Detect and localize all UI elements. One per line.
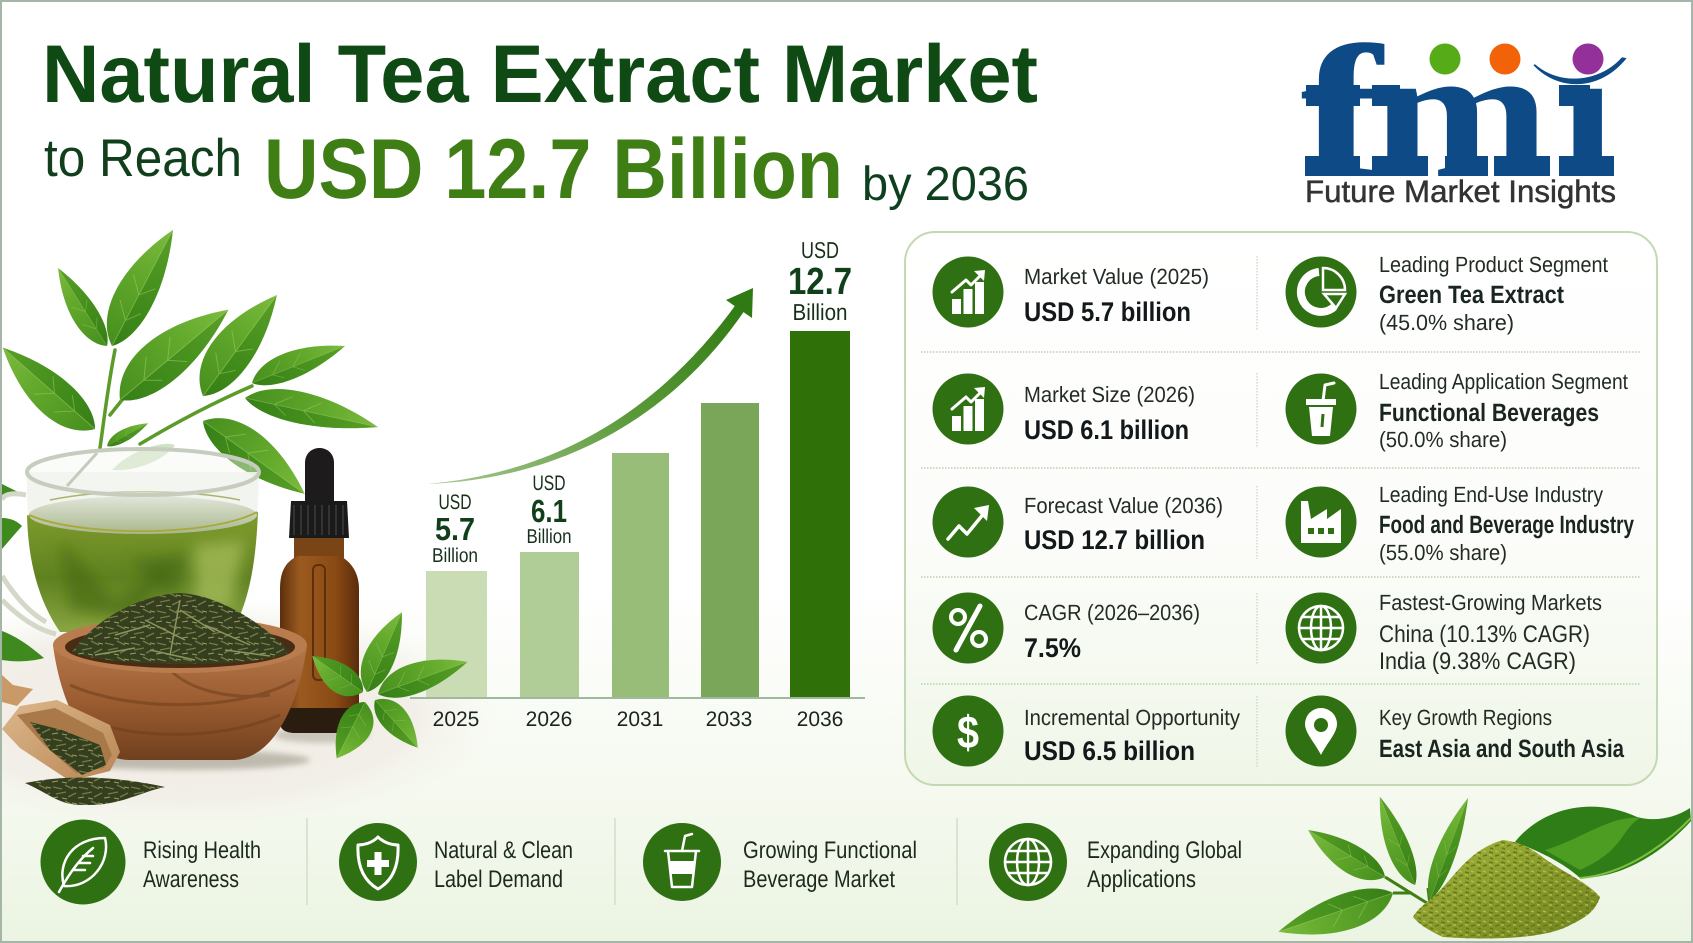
driver: expanding global applications: Expanding Global: [1087, 837, 1242, 864]
logo letter m: m: [1372, 8, 1550, 218]
year labels: 2025: [433, 708, 479, 731]
metric: fastest-growing markets: India (9.38% CAGR): [1379, 648, 1576, 675]
metric: incremental opportunity: Incremental Opportunity: [1024, 705, 1240, 730]
metric: key growth regions: Key Growth Regions: [1379, 705, 1552, 730]
value label 2026: USD: [532, 472, 566, 495]
illustration: matcha powder and leaves: [1273, 793, 1691, 943]
metric: key growth regions: East Asia and South Asia: [1379, 735, 1625, 763]
logo dots: [1430, 44, 1604, 74]
metric: incremental opportunity: [932, 696, 1240, 766]
icon: beverage cup: [643, 823, 721, 901]
driver: expanding global applications: [989, 823, 1242, 901]
metric: leading application segment: (50.0% share): [1379, 427, 1507, 452]
metric: market value 2025: USD 5.7 billion: [1024, 297, 1191, 327]
metric: leading product segment: Green Tea Extract: [1379, 281, 1565, 309]
driver: natural and clean label: Label Demand: [434, 866, 563, 893]
drivers strip: [40, 818, 1242, 905]
panel: key metrics: [905, 232, 1657, 785]
year labels: 2026: [526, 708, 572, 731]
value label 2025: Billion: [432, 545, 478, 567]
driver: natural and clean label: [339, 823, 573, 901]
icon: globe: [1286, 592, 1356, 664]
bar 2033: [701, 403, 759, 698]
icon: dollar: [932, 696, 1004, 766]
icon: percent: [932, 592, 1004, 664]
title: by year: by 2036: [862, 158, 1029, 211]
metric: key growth regions: [1286, 696, 1625, 766]
glass cup of green tea: [2, 444, 259, 634]
driver: rising health awareness: [40, 820, 261, 904]
metric: leading end-use industry: Leading End-Use Industry: [1379, 482, 1603, 507]
logo wordmark: Future Market Insights: [1305, 174, 1616, 209]
metric: leading end-use industry: [1286, 482, 1634, 565]
driver: rising health awareness: Awareness: [143, 866, 239, 893]
driver: natural and clean label: Natural & Clean: [434, 837, 573, 864]
icon: factory: [1286, 486, 1356, 558]
spilled loose tea: [25, 777, 165, 805]
value label 2036: Billion: [792, 299, 848, 325]
bar 2031: [612, 453, 669, 698]
logo slab blocks: [1305, 85, 1614, 176]
year labels: 2033: [706, 708, 752, 731]
metric: CAGR: [932, 592, 1200, 664]
driver: rising health awareness: Rising Health: [143, 837, 261, 864]
metric: fastest-growing markets: China (10.13% CAGR): [1379, 621, 1590, 648]
metric: forecast value 2036: Forecast Value (2036): [1024, 493, 1223, 518]
chart axis: [410, 697, 865, 699]
logo swoosh: [1533, 57, 1627, 84]
amber dropper bottle: [274, 448, 370, 743]
value label 2026: 6.1: [531, 493, 567, 529]
value label 2025: [432, 491, 478, 567]
value label 2025: USD: [438, 491, 472, 514]
value label 2026: Billion: [526, 526, 572, 548]
metric: leading product segment: [1286, 252, 1608, 335]
panel frame: [905, 232, 1657, 785]
metric: leading product segment: Leading Product Segment: [1379, 252, 1608, 277]
year labels: 2036: [797, 708, 843, 731]
metric: CAGR: CAGR (2026–2036): [1024, 600, 1200, 625]
leaves behind cup: [2, 484, 44, 661]
icon: pie chart: [1286, 256, 1356, 328]
icon: trend arrow: [932, 486, 1004, 558]
bar 2026: [520, 552, 579, 698]
metric: leading application segment: Leading Application Segment: [1379, 369, 1628, 394]
small tea sprig: [303, 605, 472, 767]
metric: market value 2025: Market Value (2025): [1024, 264, 1209, 289]
driver: functional beverage market: [643, 823, 917, 901]
value label 2026: [526, 472, 572, 548]
driver: functional beverage market: Growing Functional: [743, 837, 917, 864]
metric: market size 2026: [932, 374, 1195, 445]
metric: market value 2025: [932, 256, 1209, 328]
driver: functional beverage market: Beverage Market: [743, 866, 895, 893]
year labels: 2031: [617, 708, 663, 731]
tea plant stems and leaves: [0, 220, 382, 507]
metric: incremental opportunity: USD 6.5 billion: [1024, 736, 1195, 766]
icon: bar chart growth: [932, 374, 1004, 444]
metric: fastest-growing markets: [1286, 590, 1602, 675]
title: [42, 29, 1038, 217]
value label 2036: 12.7: [788, 261, 852, 303]
illustration: tea plant, cup, bowl, bottle: [0, 220, 382, 805]
matcha powder pile: [1413, 840, 1600, 938]
logo letter i: ı: [1559, 8, 1615, 218]
table surface: [0, 597, 505, 833]
bar chart: [410, 237, 865, 731]
icon: leaf: [40, 820, 126, 904]
icon: beverage cup: [1286, 374, 1356, 444]
metric: market size 2026: USD 6.1 billion: [1024, 415, 1189, 445]
icon: bar chart growth: [932, 256, 1004, 328]
growth arrow: [428, 288, 753, 484]
metric: forecast value 2036: [932, 486, 1223, 558]
title: headline value: USD 12.7 Billion: [264, 122, 843, 217]
icon: location pin: [1286, 696, 1356, 766]
metric: leading application segment: Functional Beverages: [1379, 399, 1599, 427]
wooden bowl of loose tea: [53, 593, 310, 770]
driver: expanding global applications: Applications: [1087, 866, 1196, 893]
metric: CAGR: 7.5%: [1024, 633, 1081, 663]
metric: fastest-growing markets: Fastest-Growing Markets: [1379, 590, 1602, 615]
year labels: [433, 708, 843, 731]
bar 2036: [790, 331, 850, 698]
metric: leading application segment: [1286, 369, 1628, 452]
bar 2025: [426, 571, 487, 698]
icon: shield: [339, 823, 417, 901]
icon: dollar: $: [957, 706, 979, 758]
metric: market size 2026: Market Size (2026): [1024, 382, 1195, 407]
title: to reach: to Reach: [44, 129, 242, 188]
metric: leading end-use industry: (55.0% share): [1379, 540, 1507, 565]
value label 2025: 5.7: [435, 511, 475, 547]
wooden scoop with tea: [2, 675, 120, 781]
metric: leading product segment: (45.0% share): [1379, 310, 1514, 335]
sprig leaves: [1273, 793, 1476, 943]
icon: globe: [989, 823, 1067, 901]
large tea leaves: [1515, 807, 1691, 878]
logo letter f: f: [1300, 8, 1386, 218]
logo: Future Market Insights: [1300, 8, 1627, 218]
metric: forecast value 2036: USD 12.7 billion: [1024, 525, 1205, 555]
value label 2036: [788, 237, 852, 325]
value label 2036: USD: [801, 237, 839, 263]
title line 1: Natural Tea Extract Market: [42, 29, 1038, 120]
